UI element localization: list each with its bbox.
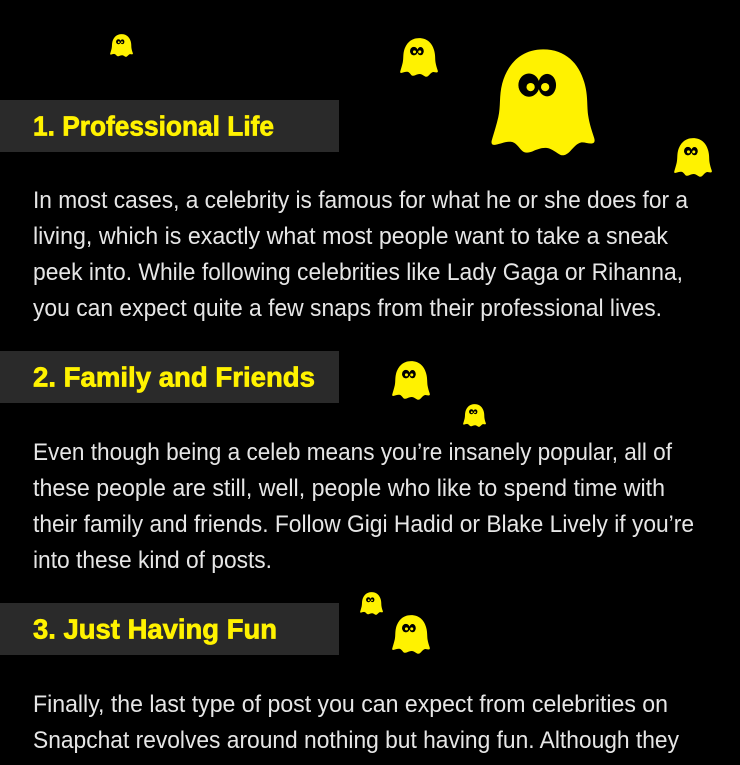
- body text 2: [33, 439, 694, 574]
- section 1: professional life: [0, 100, 689, 322]
- heading bar 1: [0, 100, 339, 152]
- body text 2: these people are still, well, people who like to spend time with: [33, 475, 665, 502]
- heading bar 2: [0, 351, 339, 403]
- icon: medium ghost section 2: [392, 361, 430, 400]
- body text 2: Even though being a celeb means you’re insanely popular, all of: [33, 439, 672, 466]
- heading bar 3: [0, 603, 339, 655]
- icon: medium ghost top right: [674, 138, 712, 177]
- icon: small ghost section 3: [360, 592, 383, 615]
- body text 2: their family and friends. Follow Gigi Hadid or Blake Lively if you’re: [33, 511, 694, 538]
- heading 2: 2. Family and Friends: [33, 362, 315, 392]
- body text 2: into these kind of posts.: [33, 547, 272, 574]
- body text 1: peek into. While following celebrities like Lady Gaga or Rihanna,: [33, 259, 683, 286]
- icon: medium ghost top centre: [400, 38, 438, 77]
- heading 1: 1. Professional Life: [33, 110, 274, 142]
- body text 3: Finally, the last type of post you can expect from celebrities on: [33, 691, 668, 718]
- icon: medium ghost section 3: [392, 615, 430, 654]
- icon: small ghost top left: [110, 34, 133, 57]
- section 2: family and friends: [0, 351, 694, 574]
- icon: large ghost: [492, 49, 595, 156]
- body text 1: [33, 187, 689, 322]
- body text 3: Snapchat revolves around nothing but having fun. Although they: [33, 727, 679, 754]
- heading 3: 3. Just Having Fun: [33, 614, 277, 644]
- body text 3: [33, 691, 679, 754]
- body text 1: In most cases, a celebrity is famous for what he or she does for a: [33, 187, 689, 214]
- section 3: just having fun: [0, 603, 679, 754]
- icon: small ghost section 2: [463, 404, 486, 427]
- body text 1: living, which is exactly what most people want to take a sneak: [33, 223, 669, 250]
- body text 1: you can expect quite a few snaps from their professional lives.: [33, 295, 662, 322]
